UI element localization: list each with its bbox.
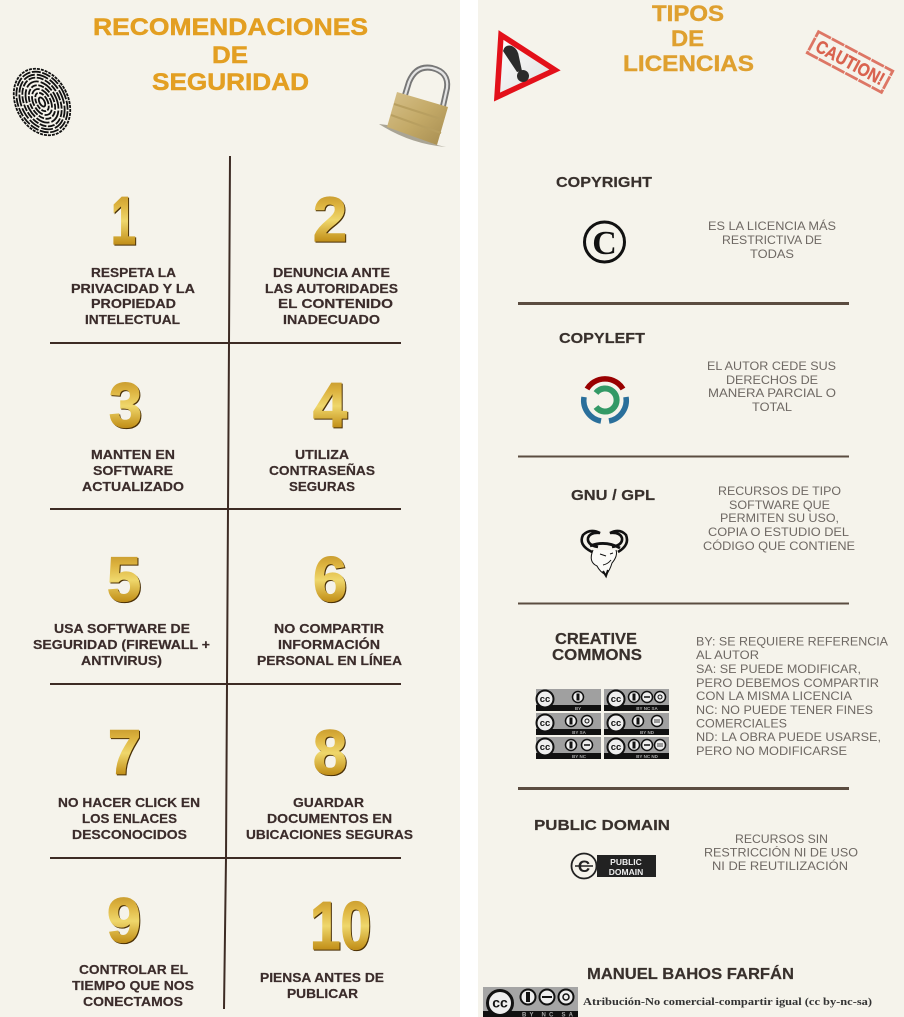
item 2: INADECUADO bbox=[283, 312, 380, 327]
author name: MANUEL BAHOS FARFÁN bbox=[587, 964, 794, 983]
item 5: 5 bbox=[107, 545, 141, 615]
section: gnu gpl bbox=[571, 484, 855, 576]
section: copyright: RESTRICTIVA DE bbox=[722, 233, 822, 247]
badge: cc by-nc-sa: cc bbox=[611, 694, 621, 705]
creative commons description bbox=[696, 634, 888, 758]
icon: caution stamp: CAUTION! bbox=[812, 36, 888, 89]
creative commons description: ND: LA OBRA PUEDE USARSE, bbox=[696, 730, 881, 744]
title: recomendaciones de seguridad: RECOMENDACIONES bbox=[93, 14, 368, 41]
item 7: 7 bbox=[108, 718, 141, 788]
item 2: EL CONTENIDO bbox=[278, 296, 393, 311]
title: tipos de licencias: DE bbox=[671, 26, 704, 51]
item 1: 1 bbox=[112, 184, 137, 260]
badge: cc by-sa: cc bbox=[540, 718, 550, 729]
item 4: CONTRASEÑAS bbox=[269, 463, 375, 478]
item 5: USA SOFTWARE DE bbox=[54, 621, 190, 636]
item 9 bbox=[72, 886, 194, 1009]
item 4: UTILIZA bbox=[295, 447, 350, 462]
item 1: PRIVACIDAD Y LA bbox=[71, 281, 196, 296]
badge: cc by-nc-nd bbox=[604, 737, 669, 759]
item 3: 3 bbox=[110, 372, 143, 442]
badge: cc by-nc bbox=[536, 737, 601, 759]
item 9: TIEMPO QUE NOS bbox=[72, 978, 194, 993]
item 1: PROPIEDAD bbox=[91, 296, 176, 311]
creative commons description: NC: NO PUEDE TENER FINES bbox=[696, 703, 873, 717]
section: public domain: PUBLIC DOMAIN bbox=[534, 817, 670, 834]
item 10 bbox=[260, 888, 384, 1001]
icon: copyright symbol bbox=[584, 222, 624, 262]
item 6: 6 bbox=[314, 546, 348, 616]
creative commons description: BY: SE REQUIERE REFERENCIA bbox=[696, 634, 888, 648]
item 10: 10 bbox=[311, 889, 372, 965]
badge: license cc by-nc-sa: cc bbox=[492, 994, 508, 1010]
item 2: LAS AUTORIDADES bbox=[265, 281, 398, 296]
icon: fingerprint bbox=[3, 59, 81, 145]
icon: public domain badge: C bbox=[578, 857, 590, 876]
section: gnu gpl: RECURSOS DE TIPO bbox=[718, 484, 841, 498]
item 4 bbox=[269, 371, 375, 494]
section: copyleft bbox=[559, 330, 836, 421]
item 8: 8 bbox=[313, 718, 347, 788]
badge: cc by-nc-sa bbox=[604, 689, 669, 711]
item 5: SEGURIDAD (FIREWALL + bbox=[33, 637, 210, 652]
badge: cc by-sa: BY SA bbox=[572, 730, 587, 735]
grid lines bbox=[50, 156, 401, 1009]
icon: public domain badge bbox=[572, 854, 656, 878]
item 7: LOS ENLACES bbox=[82, 811, 177, 826]
item 9: 9 bbox=[108, 887, 142, 957]
item 1 bbox=[71, 183, 196, 327]
item 2 bbox=[265, 185, 398, 327]
section: creative commons: COMMONS bbox=[552, 647, 642, 664]
item 7: DESCONOCIDOS bbox=[72, 827, 187, 842]
section: gnu gpl: PERMITEN SU USO, bbox=[720, 511, 839, 525]
creative commons description: AL AUTOR bbox=[696, 648, 759, 662]
badge: cc by-nd: BY ND bbox=[640, 730, 655, 735]
badge: cc by: BY bbox=[575, 706, 581, 711]
item 2: DENUNCIA ANTE bbox=[273, 265, 390, 280]
item 3: 3 bbox=[109, 371, 142, 441]
item 10: PUBLICAR bbox=[287, 986, 359, 1001]
item 3: MANTEN EN bbox=[91, 447, 175, 462]
item 2: 2 bbox=[314, 186, 348, 256]
icon: warning triangle bbox=[497, 35, 555, 97]
item 4: 4 bbox=[314, 372, 348, 442]
creative commons description: COMERCIALES bbox=[696, 716, 787, 730]
item 1: RESPETA LA bbox=[91, 265, 177, 280]
dividers bbox=[518, 302, 849, 790]
item 4: 4 bbox=[313, 371, 347, 441]
section: public domain: NI DE REUTILIZACIÓN bbox=[712, 858, 848, 873]
item 1: INTELECTUAL bbox=[85, 312, 180, 327]
item 4: SEGURAS bbox=[289, 479, 355, 494]
icon: gnu head bbox=[582, 531, 627, 576]
item 6: INFORMACIÓN bbox=[278, 637, 380, 652]
icon: padlock bbox=[379, 68, 448, 147]
panel: recomendaciones de seguridad bbox=[0, 0, 460, 1017]
title: recomendaciones de seguridad bbox=[93, 14, 368, 96]
icon: public domain badge: DOMAIN bbox=[609, 867, 643, 877]
item 8: GUARDAR bbox=[293, 795, 365, 810]
badge: cc by: cc bbox=[540, 694, 550, 705]
panel: tipos de licencias bbox=[478, 0, 904, 1017]
badge: cc by-nc: cc bbox=[540, 742, 550, 753]
item 3: SOFTWARE bbox=[93, 463, 173, 478]
badge: cc by-nc-nd: BY NC ND bbox=[636, 754, 659, 759]
section: gnu gpl: SOFTWARE QUE bbox=[729, 498, 830, 512]
creative commons description: PERO DEBEMOS COMPARTIR bbox=[696, 676, 879, 690]
badge: cc by-nc-nd: cc bbox=[611, 742, 621, 753]
item 7: 7 bbox=[109, 719, 142, 789]
section: copyright: TODAS bbox=[750, 247, 794, 261]
item 10: PIENSA ANTES DE bbox=[260, 970, 384, 985]
creative commons description: CON LA MISMA LICENCIA bbox=[696, 689, 852, 703]
license caption: Atribución-No comercial-compartir igual (cc by-nc-sa) bbox=[583, 996, 872, 1008]
item 8: DOCUMENTOS EN bbox=[267, 811, 392, 826]
section: creative commons: CREATIVE bbox=[555, 631, 637, 648]
title: tipos de licencias: TIPOS bbox=[652, 1, 724, 26]
section: gnu gpl: GNU / GPL bbox=[571, 487, 655, 504]
item 1: 1 bbox=[111, 183, 136, 259]
badge: cc by-sa bbox=[536, 713, 601, 735]
section: gnu gpl: COPIA O ESTUDIO DEL bbox=[708, 525, 849, 539]
title: tipos de licencias bbox=[623, 1, 754, 76]
item 7 bbox=[58, 718, 200, 842]
item 5 bbox=[33, 545, 210, 668]
item 6: 6 bbox=[313, 545, 347, 615]
badge: cc by-nc-sa: BY NC SA bbox=[636, 706, 658, 711]
section: creative commons bbox=[536, 631, 888, 759]
item 8 bbox=[246, 718, 413, 842]
section: gnu gpl: CÓDIGO QUE CONTIENE bbox=[703, 538, 855, 553]
item 9: CONECTAMOS bbox=[83, 994, 183, 1009]
section: public domain: RECURSOS SIN bbox=[735, 832, 828, 846]
item 3: ACTUALIZADO bbox=[82, 479, 184, 494]
item 2: 2 bbox=[313, 185, 347, 255]
section: copyright bbox=[556, 174, 836, 262]
section: copyright: ES LA LICENCIA MÁS bbox=[708, 218, 836, 233]
item 10: 10 bbox=[310, 888, 371, 964]
item 3 bbox=[82, 371, 184, 494]
creative commons description: SA: SE PUEDE MODIFICAR, bbox=[696, 662, 861, 676]
item 5: ANTIVIRUS) bbox=[81, 653, 162, 668]
badge: license cc by-nc-sa bbox=[483, 987, 578, 1017]
item 6 bbox=[257, 545, 403, 668]
item 9: 9 bbox=[107, 886, 141, 956]
section: copyleft: TOTAL bbox=[752, 400, 792, 414]
section: copyright: COPYRIGHT bbox=[556, 174, 652, 191]
icon: public domain badge: PUBLIC bbox=[610, 857, 642, 867]
title: recomendaciones de seguridad: DE bbox=[212, 42, 248, 69]
badge: cc by-nd bbox=[604, 713, 669, 735]
badge: cc by bbox=[536, 689, 601, 711]
item 6: NO COMPARTIR bbox=[274, 621, 385, 636]
item 7: NO HACER CLICK EN bbox=[58, 795, 200, 810]
section: public domain: RESTRICCIÓN NI DE USO bbox=[704, 844, 858, 860]
item 9: CONTROLAR EL bbox=[79, 962, 188, 977]
title: recomendaciones de seguridad: SEGURIDAD bbox=[152, 69, 309, 96]
item 8: 8 bbox=[314, 719, 348, 789]
creative commons description: PERO NO MODIFICARSE bbox=[696, 744, 847, 758]
item 6: PERSONAL EN LÍNEA bbox=[257, 653, 403, 668]
section: copyleft: EL AUTOR CEDE SUS bbox=[707, 359, 836, 373]
icon: copyright symbol: C bbox=[592, 225, 617, 262]
section: copyleft: MANERA PARCIAL O bbox=[708, 386, 836, 400]
section: public domain bbox=[534, 817, 858, 878]
icon: copyleft logo bbox=[584, 379, 626, 421]
section: copyleft: DERECHOS DE bbox=[726, 373, 818, 387]
badge: cc by-nd: cc bbox=[611, 718, 621, 729]
title: tipos de licencias: LICENCIAS bbox=[623, 51, 754, 76]
item 5: 5 bbox=[108, 546, 142, 616]
section: copyleft: COPYLEFT bbox=[559, 330, 645, 347]
item 8: UBICACIONES SEGURAS bbox=[246, 827, 413, 842]
badge: cc by-nc: BY NC bbox=[572, 754, 587, 759]
